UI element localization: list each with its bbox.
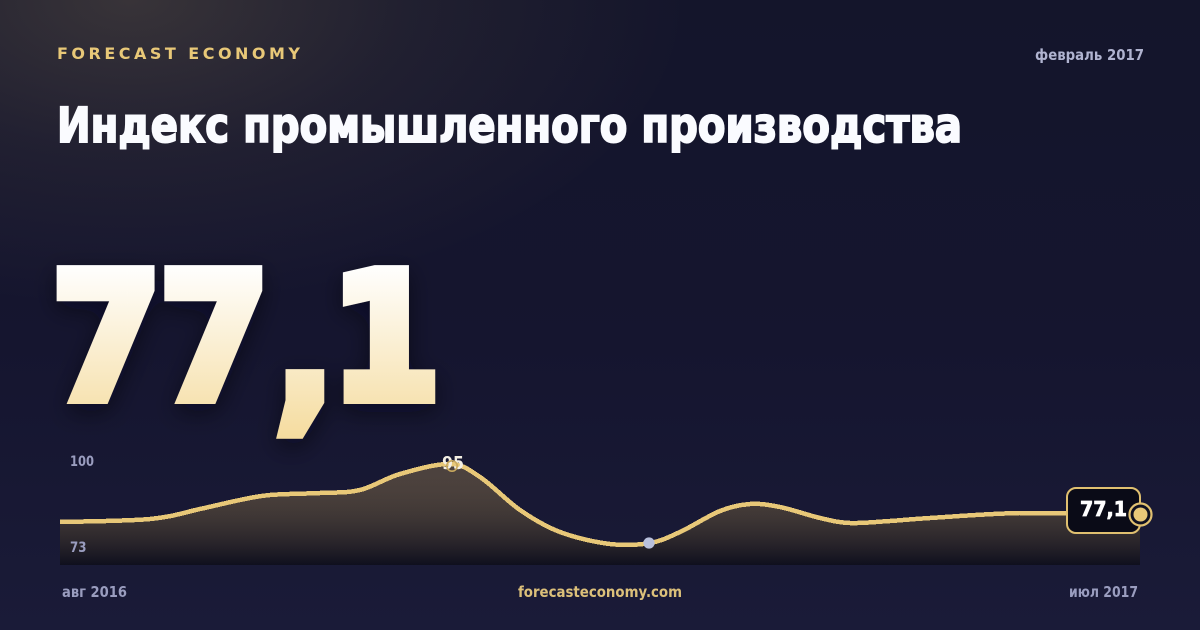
- chart: [60, 453, 1152, 565]
- end marker: [1130, 504, 1152, 526]
- value callout: 77,1: [1080, 497, 1127, 521]
- x label: start: авг 2016: [62, 583, 127, 601]
- axis label: 100: 100: [70, 454, 94, 470]
- trend line: [60, 464, 1140, 545]
- peak label: 95: [442, 453, 464, 474]
- big value: 77,1: [52, 238, 441, 450]
- area fill: [60, 464, 1140, 565]
- x label: end: июл 2017: [1069, 583, 1138, 601]
- value callout: [1067, 488, 1140, 533]
- date label: февраль 2017: [1035, 46, 1144, 64]
- peak marker: [447, 461, 457, 471]
- source link: forecasteconomy.com: [518, 583, 682, 601]
- minimum marker: [643, 537, 655, 549]
- title: Индекс промышленного производства: [57, 98, 962, 154]
- axis label: 73: 73: [70, 540, 86, 556]
- brand label: FORECAST ECONOMY: [57, 44, 300, 63]
